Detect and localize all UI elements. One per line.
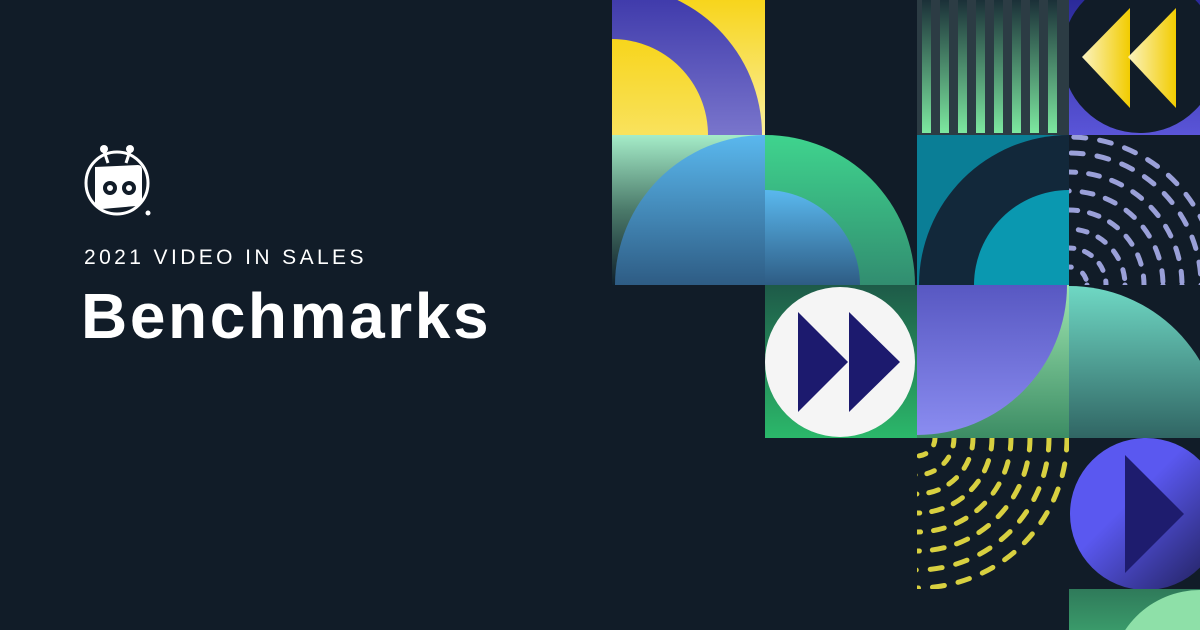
tile: yellow dash arcs [917,438,1069,589]
tile: rewind icon [1062,0,1200,135]
tile: yellow quarter ring [612,0,765,135]
tile: purple quarter disc [917,285,1069,438]
logo [84,145,150,216]
mosaic [612,0,1200,630]
tile: blue quarter disc [612,135,765,285]
title: Benchmarks [81,280,491,352]
subtitle: 2021 VIDEO IN SALES [84,246,367,269]
tile: teal quarter disc [1069,286,1200,438]
tile: bottom green [1069,589,1200,630]
tile: green quarter ring [765,135,915,285]
tile: lavender dash arcs [1069,135,1200,285]
tile: vertical stripes [917,0,1069,135]
tile: fast-forward icon [765,285,917,438]
tile: play icon [1070,438,1200,590]
tile: teal dark ring [917,135,1069,285]
